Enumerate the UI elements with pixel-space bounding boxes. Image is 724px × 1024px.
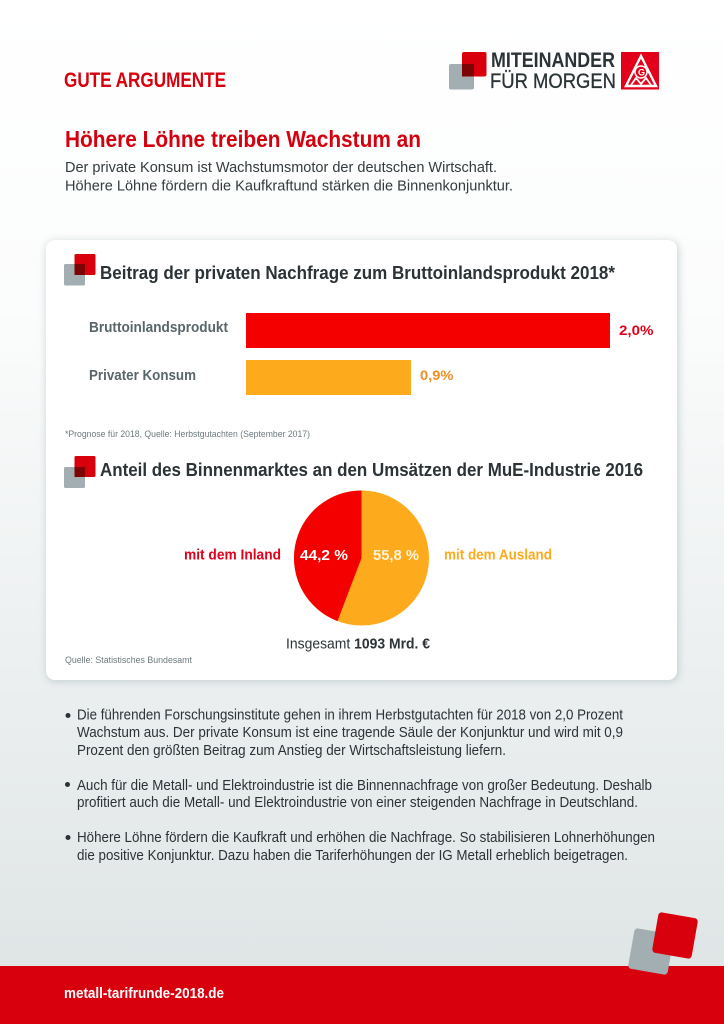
bar: Bruttoinlandsprodukt: Bruttoinlandsprodukt [89, 320, 228, 336]
intro text [65, 159, 513, 194]
pie chart [294, 490, 429, 626]
bullet 2: profitiert auch die Metall- und Elektroindustrie von einer steigenden Nachfrage in Deutschland. [77, 795, 638, 811]
icon: IG Metall emblem: G [638, 68, 645, 78]
bar: Privater Konsum: 0,9% [420, 367, 454, 383]
logo: Miteinander für Morgen [449, 49, 659, 93]
bar chart [89, 313, 654, 395]
icon: IG Metall emblem [621, 52, 659, 90]
bullet 2: Auch für die Metall- und Elektroindustrie ist die Binnennachfrage von großer Bedeutung. Deshalb [77, 778, 652, 794]
logo: Miteinander für Morgen: MITEINANDER [491, 49, 615, 72]
bar: Bruttoinlandsprodukt: 2,0% [619, 322, 654, 338]
bar: Privater Konsum: Privater Konsum [89, 368, 196, 384]
icon: corner squares [628, 912, 698, 975]
bullet 1: Wachstum aus. Der private Konsum ist eine tragende Säule der Konjunktur und wird mit 0,9 [77, 725, 623, 741]
bullet 3: Höhere Löhne fördern die Kaufkraft und erhöhen die Nachfrage. So stabilisieren Lohnerhöhungen [77, 830, 655, 846]
label: Ausland share: 55,8 % [373, 547, 419, 564]
logo: Miteinander für Morgen: FÜR MORGEN [490, 70, 616, 93]
bar: Privater Konsum [89, 360, 454, 395]
bullet 3: die positive Konjunktur. Dazu haben die Tariferhöhungen der IG Metall erheblich beigetragen. [77, 848, 628, 864]
bullet 1 [66, 708, 623, 759]
heading: bar chart: Beitrag der privaten Nachfrage zum Bruttoinlandsprodukt 2018* [100, 263, 615, 283]
bullet 2 [65, 778, 652, 811]
title: Höhere Löhne treiben Wachstum an [65, 126, 421, 152]
footnote: bar chart source: *Prognose für 2018, Quelle: Herbstgutachten (September 2017) [65, 429, 310, 439]
bullet 1: Prozent den größten Beitrag zum Anstieg der Wirtschaftsleistung liefern. [77, 743, 506, 759]
bullet list [65, 708, 655, 864]
label: Inland share: 44,2 % [300, 547, 348, 564]
section label: GUTE ARGUMENTE [64, 69, 226, 92]
legend: mit dem Inland: mit dem Inland [184, 548, 281, 564]
footer band [0, 966, 724, 1024]
pie total: Insgesamt 1093 Mrd. € [286, 636, 431, 652]
footnote: pie chart source: Quelle: Statistisches Bundesamt [65, 655, 192, 665]
heading: pie chart: Anteil des Binnenmarktes an den Umsätzen der MuE-Industrie 2016 [100, 460, 643, 480]
icon: heading squares 1 [64, 254, 96, 286]
icon: heading squares 2 [64, 456, 96, 488]
legend: mit dem Ausland: mit dem Ausland [444, 548, 552, 564]
panel: charts card [46, 240, 679, 682]
footer url: metall-tarifrunde-2018.de [64, 986, 224, 1002]
intro text: Der private Konsum ist Wachstumsmotor der deutschen Wirtschaft. [65, 159, 497, 176]
bar: Bruttoinlandsprodukt [89, 313, 654, 348]
intro text: Höhere Löhne fördern die Kaufkraftund stärken die Binnenkonjunktur. [65, 178, 513, 194]
bullet 1: Die führenden Forschungsinstitute gehen in ihrem Herbstgutachten für 2018 von 2,0 Prozent [77, 708, 623, 724]
bullet 3 [66, 830, 655, 864]
